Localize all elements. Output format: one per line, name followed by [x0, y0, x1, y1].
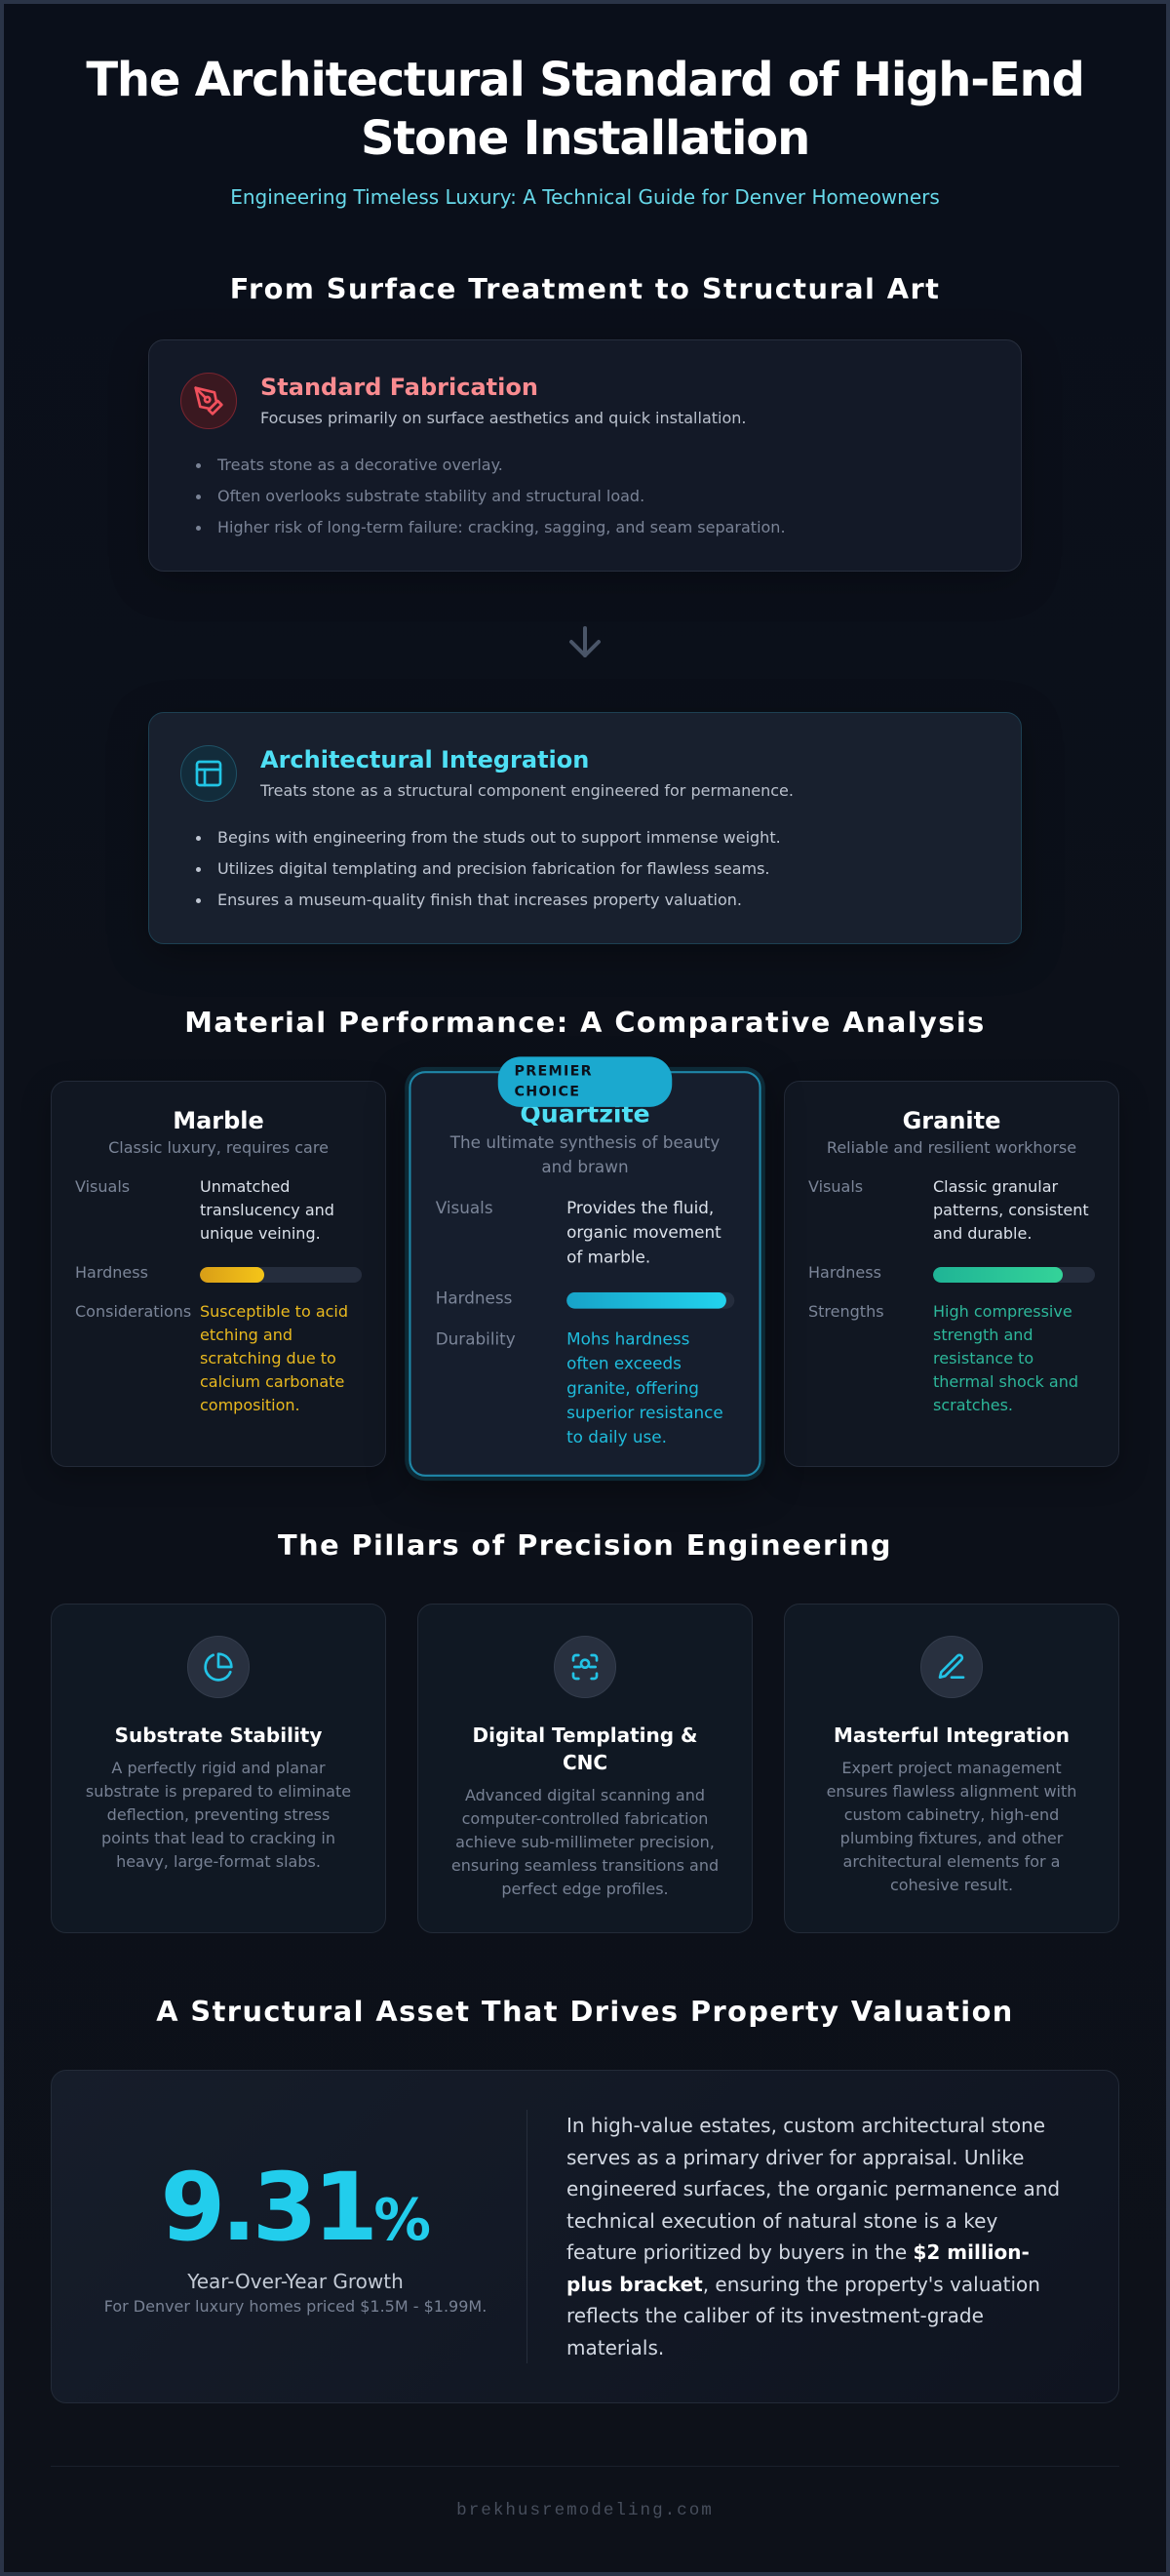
stat: growth: Year-Over-Year Growth: [187, 2270, 404, 2293]
standard fabrication heading: Standard Fabrication: [260, 374, 538, 401]
card: granite: Classic granular patterns, consistent and durable.: [933, 1177, 1089, 1243]
title: The Architectural Standard of High-End Stone Installation: [86, 53, 1084, 166]
card: granite: [784, 1081, 1119, 1467]
panel: architectural integration: [148, 712, 1022, 944]
card: quartzite: [409, 1071, 761, 1477]
card: marble: Marble: [173, 1107, 264, 1134]
heading: valuation: A Structural Asset That Drives Property Valuation: [156, 1995, 1014, 2028]
standard fabrication list: Treats stone as a decorative overlay.: [217, 456, 503, 474]
card: granite: Strengths: [808, 1302, 884, 1321]
architectural integration list: [196, 828, 781, 909]
pillar: masterful integration: Expert project management ensures flawless alignment with custom cabinetry, high-end plumbing fixtures, and other architectural elements for a cohesive result.: [827, 1759, 1076, 1894]
architectural integration heading: Treats stone as a structural component engineered for permanence.: [260, 781, 794, 800]
heading: pillars: The Pillars of Precision Engineering: [278, 1528, 892, 1562]
standard fabrication list: Often overlooks substrate stability and structural load.: [217, 487, 644, 505]
heading: material performance: Material Performance: A Comparative Analysis: [184, 1006, 986, 1039]
stat: growth: For Denver luxury homes priced $1.5M - $1.99M.: [104, 2297, 487, 2316]
standard fabrication list: [196, 456, 786, 536]
architectural integration list: Begins with engineering from the studs out to support immense weight.: [217, 828, 781, 847]
icon: pen tool: [180, 373, 237, 429]
architectural integration list: Utilizes digital templating and precision fabrication for flawless seams.: [217, 859, 770, 878]
footer: brekhusremodeling.com: [456, 2501, 714, 2520]
card: granite: Reliable and resilient workhorse: [827, 1138, 1076, 1157]
icon: layout: [180, 745, 237, 802]
architectural integration list: Ensures a museum-quality finish that increases property valuation.: [217, 891, 742, 909]
pillar: masterful integration: Masterful Integration: [834, 1724, 1070, 1747]
card: quartzite: The ultimate synthesis of beauty and brawn: [450, 1132, 720, 1176]
card: granite: Hardness: [808, 1263, 881, 1282]
card: granite: Visuals: [808, 1177, 863, 1196]
card: quartzite: Provides the fluid, organic movement of marble.: [566, 1198, 722, 1267]
comparison cards: [51, 1056, 1119, 1481]
icon: pen line: [920, 1636, 983, 1698]
pillar: digital templating: Advanced digital scanning and computer-controlled fabrication achieve sub-millimeter precision, ensuring seamless transitions and perfect edge profiles.: [451, 1786, 719, 1898]
card: marble: Classic luxury, requires care: [108, 1138, 329, 1157]
architectural integration heading: [259, 746, 794, 800]
card: marble: Unmatched translucency and unique veining.: [200, 1177, 334, 1243]
badge: premier choice: [498, 1056, 672, 1107]
stat: growth: [104, 2153, 487, 2316]
standard fabrication heading: [260, 374, 746, 427]
heading: from surface treatment: From Surface Treatment to Structural Art: [230, 272, 940, 305]
card: marble: Visuals: [75, 1177, 130, 1196]
panel: valuation: [51, 2070, 1119, 2403]
pillar: masterful integration: [784, 1604, 1119, 1933]
card: granite: Granite: [903, 1107, 1000, 1134]
icon: scan: [554, 1636, 616, 1698]
subtitle: Engineering Timeless Luxury: A Technical Guide for Denver Homeowners: [230, 185, 940, 209]
card: quartzite: Visuals: [436, 1198, 493, 1217]
card: quartzite: Hardness: [436, 1288, 512, 1308]
pillar: digital templating: [417, 1604, 753, 1933]
card: granite: High compressive strength and resistance to thermal shock and scratches.: [933, 1302, 1078, 1414]
card: quartzite: Quartzite: [520, 1100, 650, 1129]
arrow: down: [569, 626, 601, 657]
card: marble: Susceptible to acid etching and scratching due to calcium carbonate composition.: [200, 1302, 348, 1414]
pillar: substrate stability: Substrate Stability: [115, 1724, 322, 1747]
pillar cards: [51, 1604, 1119, 1933]
panel: standard fabrication: [148, 339, 1022, 572]
badge: premier choice: PREMIER CHOICE: [515, 1063, 593, 1100]
pillar: digital templating: Digital Templating & CNC: [473, 1724, 697, 1774]
card: quartzite: Mohs hardness often exceeds granite, offering superior resistance to daily use.: [566, 1329, 723, 1447]
card: marble: Hardness: [75, 1263, 148, 1282]
architectural integration heading: Architectural Integration: [260, 746, 589, 773]
pillar: substrate stability: A perfectly rigid and planar substrate is prepared to eliminate deflection, preventing stress points that lead to cracking in heavy, large-format slabs.: [86, 1759, 351, 1871]
stat: growth: 9.31%: [160, 2153, 426, 2262]
card: marble: [51, 1081, 386, 1467]
footer: [51, 2466, 1119, 2522]
card: marble: Considerations: [75, 1302, 191, 1321]
standard fabrication heading: Focuses primarily on surface aesthetics and quick installation.: [260, 409, 746, 427]
standard fabrication list: Higher risk of long-term failure: cracking, sagging, and seam separation.: [217, 518, 786, 536]
icon: pie chart: [187, 1636, 250, 1698]
pillar: substrate stability: [51, 1604, 386, 1933]
card: quartzite: Durability: [436, 1329, 516, 1349]
valuation text: In high-value estates, custom architectural stone serves as a primary driver for appraisal. Unlike engineered surfaces, the organic permanence and technical execution of natural stone is a key feature prioritized by buyers in the $2 million-plus bracket, ensuring the property's valuation reflects the caliber of its investment-grade materials.: [566, 2114, 1060, 2358]
